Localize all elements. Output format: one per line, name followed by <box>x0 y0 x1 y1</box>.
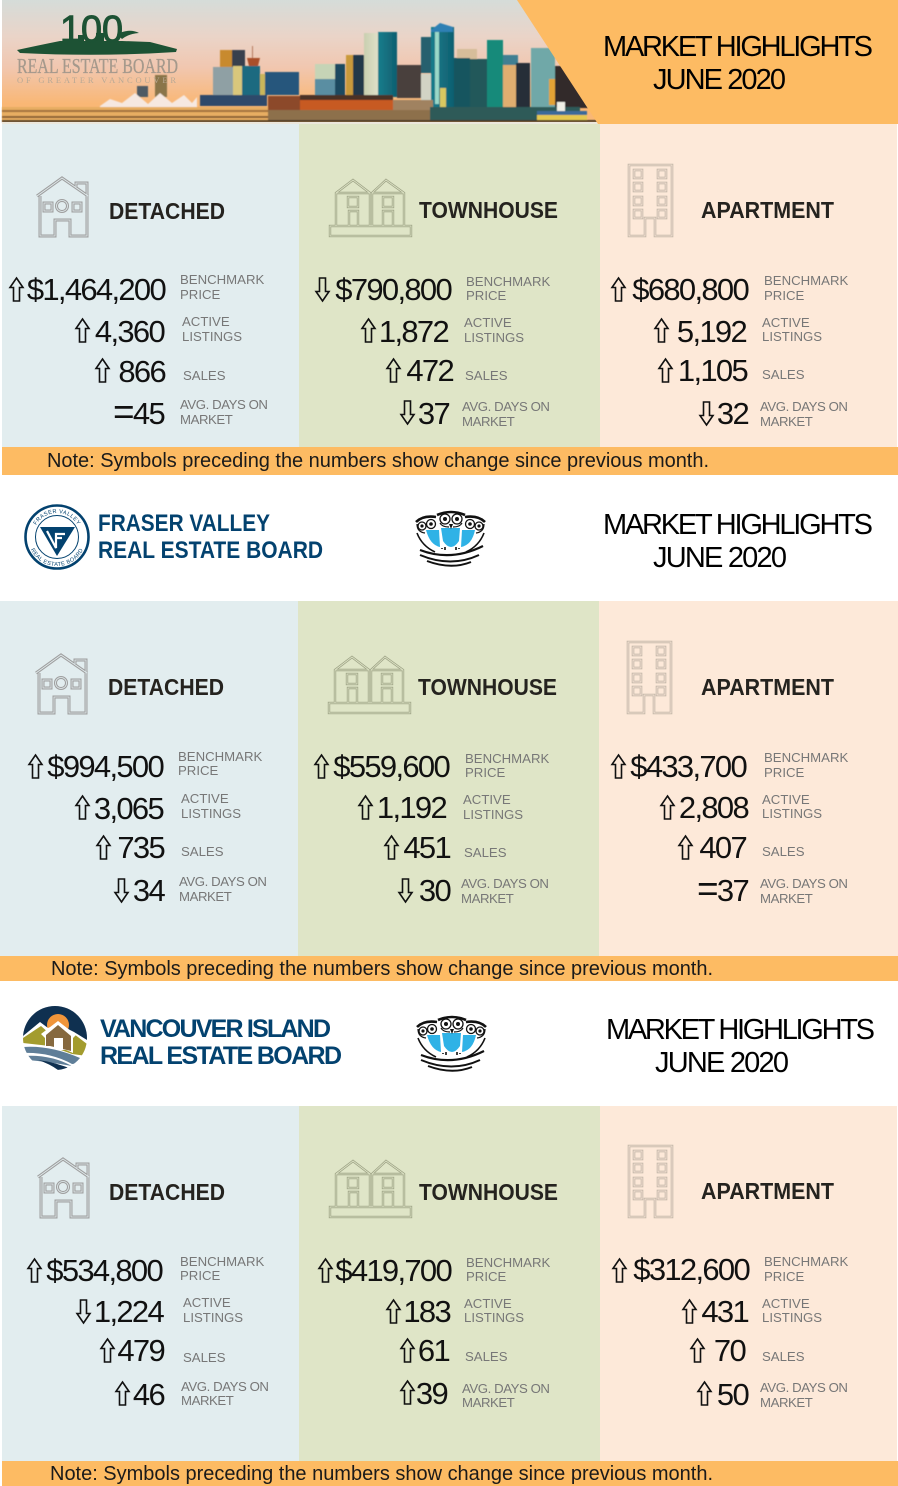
active listings: LISTINGS <box>762 806 822 821</box>
sales: SALES <box>181 844 224 859</box>
heading: detached: DETACHED <box>108 674 224 700</box>
sales <box>97 830 224 865</box>
sales <box>385 830 507 865</box>
benchmark price <box>10 272 264 307</box>
days on market: 32 <box>717 396 748 431</box>
sales <box>679 830 805 865</box>
sales: 407 <box>699 830 746 865</box>
sales: 472 <box>406 353 453 388</box>
active listings <box>683 1294 822 1329</box>
benchmark price: BENCHMARK <box>466 274 550 289</box>
section 2 title <box>603 509 873 574</box>
active listings: 183 <box>403 1294 450 1329</box>
sales <box>96 354 226 389</box>
panel: detached <box>10 178 268 432</box>
days on market: MARKET <box>462 414 515 429</box>
days on market: MARKET <box>181 1393 234 1408</box>
active listings: 4,360 <box>95 314 165 349</box>
days on market: AVG. DAYS ON <box>181 1379 269 1394</box>
active listings <box>655 314 822 349</box>
active listings: ACTIVE <box>181 791 229 806</box>
active listings: LISTINGS <box>762 1310 822 1325</box>
sales: 61 <box>418 1333 449 1368</box>
benchmark price: PRICE <box>466 288 507 303</box>
days on market: MARKET <box>760 1395 813 1410</box>
days on market: =37 <box>697 868 748 909</box>
active listings <box>387 1294 524 1329</box>
active listings: 431 <box>701 1294 748 1329</box>
heading: townhouse: TOWNHOUSE <box>419 197 558 223</box>
heading: detached: DETACHED <box>109 198 225 224</box>
active listings: LISTINGS <box>464 330 524 345</box>
sales: SALES <box>183 368 226 383</box>
note bar 1: Note: Symbols preceding the numbers show change since previous month. <box>47 450 709 472</box>
icon: house <box>38 1159 89 1217</box>
active listings: ACTIVE <box>762 1296 810 1311</box>
active listings: LISTINGS <box>463 807 523 822</box>
active listings: 1,872 <box>379 314 448 349</box>
section 3: Vancouver Island <box>2 1106 897 1461</box>
panel: detached <box>29 655 267 908</box>
benchmark price: PRICE <box>465 765 506 780</box>
icon: owls in nest <box>417 1017 486 1071</box>
heading: detached: DETACHED <box>109 1179 225 1205</box>
days on market <box>700 396 848 431</box>
panel: apartment <box>612 165 848 431</box>
active listings: 1,192 <box>377 790 446 825</box>
benchmark price <box>612 272 848 307</box>
sales: 479 <box>117 1333 164 1368</box>
days on market <box>115 873 267 908</box>
days on market: AVG. DAYS ON <box>760 876 848 891</box>
days on market <box>401 1376 550 1411</box>
benchmark price: $790,800 <box>335 272 452 307</box>
days on market: AVG. DAYS ON <box>180 397 268 412</box>
benchmark price: PRICE <box>466 1269 507 1284</box>
sales: SALES <box>183 1350 226 1365</box>
sales <box>401 1333 508 1368</box>
days on market: 46 <box>133 1377 164 1412</box>
days on market: MARKET <box>760 891 813 906</box>
days on market <box>399 873 549 908</box>
benchmark price: BENCHMARK <box>465 751 549 766</box>
days on market: AVG. DAYS ON <box>179 874 267 889</box>
active listings: 5,192 <box>677 314 746 349</box>
benchmark price: $419,700 <box>335 1253 452 1288</box>
active listings <box>661 790 822 825</box>
logo: Fraser Valley Real Estate Board: FRASER VALLEY <box>33 509 81 525</box>
panel: apartment <box>612 642 848 909</box>
active listings <box>359 790 523 825</box>
section 3 title: JUNE 2020 <box>655 1047 789 1079</box>
days on market: 37 <box>418 396 449 431</box>
heading: apartment: APARTMENT <box>701 674 834 700</box>
logo: Fraser Valley Real Estate Board: REAL ESTATE BOARD <box>98 537 323 564</box>
active listings: LISTINGS <box>762 329 822 344</box>
icon: apartment <box>628 642 671 713</box>
active listings: LISTINGS <box>464 1310 524 1325</box>
logo: Vancouver Island Real Estate Board: VANCOUVER ISLAND <box>100 1015 331 1043</box>
logo: Fraser Valley Real Estate Board: REAL ESTATE BOARD <box>31 548 82 566</box>
icon: house <box>36 655 87 713</box>
heading: apartment: APARTMENT <box>701 197 834 223</box>
logo: Fraser Valley Real Estate Board <box>24 504 323 570</box>
sales: 70 <box>714 1333 746 1368</box>
active listings: ACTIVE <box>762 315 810 330</box>
sales <box>387 353 508 388</box>
sales: SALES <box>762 1349 805 1364</box>
benchmark price: BENCHMARK <box>180 272 264 287</box>
icon: house <box>37 178 88 236</box>
active listings <box>362 314 524 349</box>
sales: SALES <box>464 845 507 860</box>
panel: townhouse <box>315 657 557 908</box>
active listings: ACTIVE <box>182 314 230 329</box>
active listings <box>76 791 241 826</box>
panel: detached <box>28 1159 269 1412</box>
icon: owls in nest <box>416 512 485 566</box>
days on market: 30 <box>419 873 451 908</box>
heading: townhouse: TOWNHOUSE <box>418 674 557 700</box>
active listings: 3,065 <box>94 791 163 826</box>
active listings: ACTIVE <box>463 792 511 807</box>
section 2 title: JUNE 2020 <box>653 542 787 574</box>
sales: 735 <box>117 830 164 865</box>
days on market: AVG. DAYS ON <box>760 1380 848 1395</box>
sales: 1,105 <box>678 353 747 388</box>
logo: Vancouver Island Real Estate Board <box>23 1006 342 1070</box>
sales <box>691 1333 805 1368</box>
days on market <box>698 1377 848 1412</box>
days on market <box>116 1377 269 1412</box>
note bar 3: Note: Symbols preceding the numbers show change since previous month. <box>50 1463 713 1485</box>
banner: Vancouver skyline <box>2 0 598 124</box>
sales: 451 <box>403 830 450 865</box>
sales: 866 <box>118 354 165 389</box>
active listings: 1,224 <box>94 1294 164 1329</box>
benchmark price: $680,800 <box>632 272 749 307</box>
logo: Vancouver Island Real Estate Board: REAL ESTATE BOARD <box>100 1042 342 1070</box>
benchmark price: $312,600 <box>633 1252 750 1287</box>
panel: townhouse <box>319 1161 558 1411</box>
active listings: LISTINGS <box>183 1310 243 1325</box>
section 3 title <box>606 1014 875 1079</box>
logo: Fraser Valley Real Estate Board: FRASER VALLEY <box>98 510 270 537</box>
benchmark price: BENCHMARK <box>466 1255 550 1270</box>
heading: townhouse: TOWNHOUSE <box>419 1179 558 1205</box>
days on market: MARKET <box>180 412 233 427</box>
logo: Real Estate Board of Greater Vancouver: 100 <box>60 9 123 51</box>
section 2 title: MARKET HIGHLIGHTS <box>603 509 873 541</box>
icon: apartment <box>629 1146 672 1217</box>
active listings: ACTIVE <box>762 792 810 807</box>
section 1 title banner: MARKET HIGHLIGHTS <box>603 31 873 63</box>
days on market: MARKET <box>760 414 813 429</box>
section 2: Fraser Valley <box>0 601 898 956</box>
benchmark price <box>612 749 848 784</box>
benchmark price: PRICE <box>180 1268 221 1283</box>
days on market: MARKET <box>462 1395 515 1410</box>
benchmark price: $994,500 <box>47 749 164 784</box>
benchmark price <box>316 272 550 307</box>
sales: SALES <box>465 1349 508 1364</box>
icon: apartment <box>629 165 672 236</box>
benchmark price: $559,600 <box>333 749 450 784</box>
sales: SALES <box>762 844 805 859</box>
logo: Real Estate Board of Greater Vancouver: OF GREATER VANCOUVER <box>17 75 176 85</box>
days on market: 34 <box>133 873 165 908</box>
benchmark price <box>28 1253 264 1288</box>
benchmark price: BENCHMARK <box>180 1254 264 1269</box>
days on market: AVG. DAYS ON <box>462 399 550 414</box>
icon: townhouse <box>329 657 410 713</box>
benchmark price: $1,464,200 <box>27 272 166 307</box>
active listings <box>76 314 242 349</box>
days on market <box>401 396 550 431</box>
benchmark price: PRICE <box>764 1269 805 1284</box>
active listings: ACTIVE <box>464 315 512 330</box>
benchmark price: PRICE <box>180 287 221 302</box>
benchmark price <box>29 749 262 784</box>
sales: SALES <box>465 368 508 383</box>
section 1 title banner: JUNE 2020 <box>653 64 786 96</box>
active listings: LISTINGS <box>182 329 242 344</box>
section 1 title banner <box>517 0 898 124</box>
benchmark price: PRICE <box>764 288 805 303</box>
benchmark price: BENCHMARK <box>764 750 848 765</box>
benchmark price: $534,800 <box>46 1253 163 1288</box>
panel: apartment <box>613 1146 848 1412</box>
note bar 2 <box>0 956 898 981</box>
logo: Real Estate Board of Greater Vancouver <box>17 9 178 85</box>
logo: Real Estate Board of Greater Vancouver: REAL ESTATE BOARD <box>17 54 178 78</box>
sales <box>659 353 805 388</box>
icon: townhouse <box>330 1161 411 1217</box>
active listings: ACTIVE <box>464 1296 512 1311</box>
note bar 1 <box>2 447 898 475</box>
days on market: 39 <box>416 1376 447 1411</box>
benchmark price <box>319 1253 550 1288</box>
days on market <box>113 391 268 432</box>
days on market: 50 <box>717 1377 749 1412</box>
benchmark price: BENCHMARK <box>764 273 848 288</box>
benchmark price: BENCHMARK <box>764 1254 848 1269</box>
panel: townhouse <box>316 180 558 431</box>
benchmark price: BENCHMARK <box>178 749 262 764</box>
benchmark price: PRICE <box>178 763 219 778</box>
days on market: AVG. DAYS ON <box>760 399 848 414</box>
active listings: ACTIVE <box>183 1295 231 1310</box>
days on market: AVG. DAYS ON <box>461 876 549 891</box>
benchmark price <box>613 1252 848 1287</box>
sales: SALES <box>762 367 805 382</box>
days on market: AVG. DAYS ON <box>462 1381 550 1396</box>
active listings <box>77 1294 243 1329</box>
icon: townhouse <box>330 180 411 236</box>
days on market: =45 <box>113 391 164 432</box>
days on market: MARKET <box>461 891 514 906</box>
note bar 3 <box>2 1461 898 1486</box>
days on market <box>697 868 848 909</box>
days on market: MARKET <box>179 889 232 904</box>
note bar 2: Note: Symbols preceding the numbers show change since previous month. <box>51 958 713 980</box>
sales <box>101 1333 226 1368</box>
section 1: Greater Vancouver <box>2 124 897 447</box>
active listings: LISTINGS <box>181 806 241 821</box>
benchmark price: PRICE <box>764 765 805 780</box>
benchmark price <box>315 749 549 784</box>
section 3 title: MARKET HIGHLIGHTS <box>606 1014 875 1046</box>
benchmark price: $433,700 <box>630 749 747 784</box>
active listings: 2,808 <box>679 790 748 825</box>
heading: apartment: APARTMENT <box>701 1178 834 1204</box>
